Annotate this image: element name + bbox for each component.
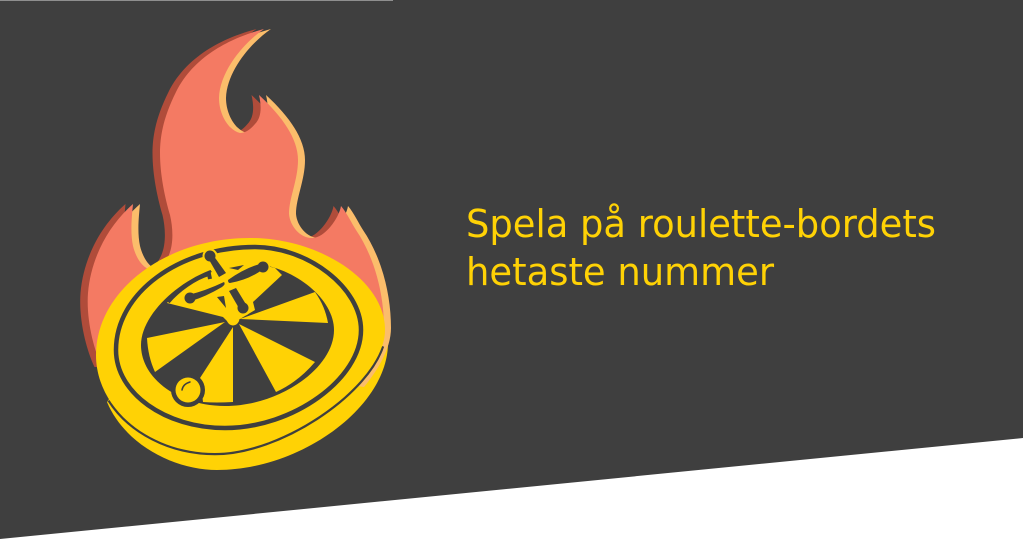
heading (466, 202, 936, 294)
disc separation line (110, 346, 382, 453)
spindle (168, 250, 268, 314)
heading: hetaste nummer (466, 250, 774, 294)
spindle halo (190, 256, 263, 308)
inner arc and slivers (168, 274, 210, 302)
spindle arms and knobs (184, 250, 268, 314)
heading: Spela på roulette-bordets (466, 202, 936, 246)
icon: flaming roulette wheel (80, 29, 391, 470)
top disc of wheel (96, 238, 385, 453)
hub (226, 310, 240, 326)
outer ring (116, 247, 361, 428)
flame (80, 29, 391, 387)
roulette ball (171, 373, 205, 407)
inner wheel face (141, 263, 334, 406)
wheel wedges (147, 258, 328, 402)
lower disc of wheel (107, 300, 388, 470)
